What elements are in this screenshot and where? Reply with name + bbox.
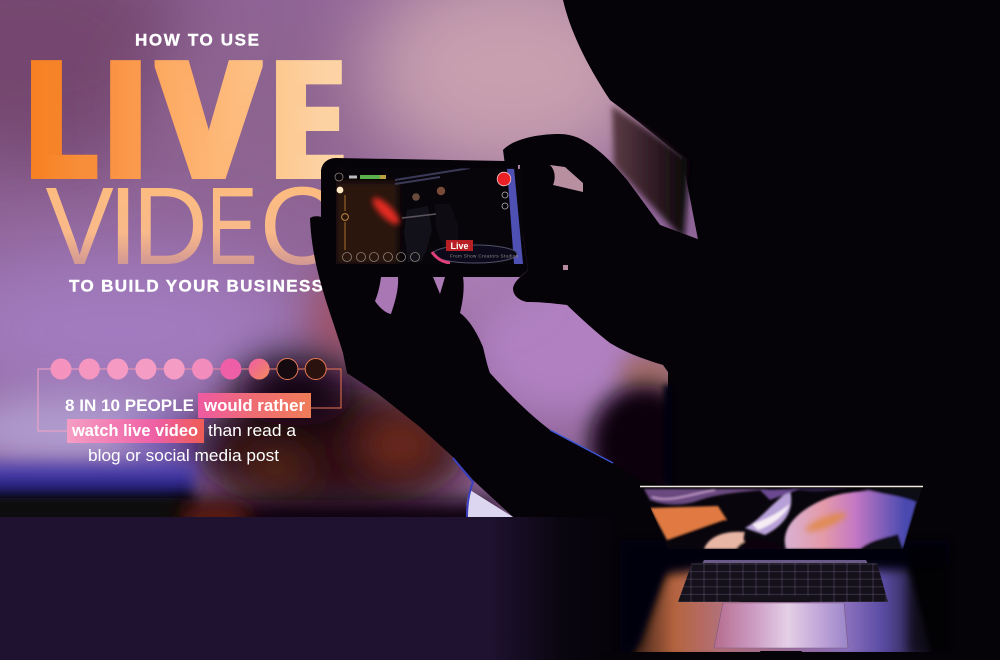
title word: LIVE: V	[159, 29, 258, 212]
stream caption: From Show Creators Studios	[450, 254, 519, 258]
hand edge over neck glow	[600, 152, 700, 300]
stage truss	[395, 168, 470, 184]
title word: LIVE	[33, 28, 339, 212]
red spotlight	[369, 194, 403, 228]
gaps between left hand fingers	[375, 277, 445, 314]
space bar	[740, 596, 810, 602]
title line: how to use: HOW TO USE	[135, 30, 259, 50]
live badge	[446, 240, 473, 251]
highlight: would rather	[198, 393, 311, 418]
audio level meter	[349, 175, 386, 179]
phone screen	[333, 167, 525, 265]
stat text: 8 IN 10 PEOPLE	[65, 396, 194, 415]
keyboard	[678, 563, 888, 602]
laptop screen	[640, 486, 925, 551]
phone body	[321, 158, 528, 277]
gap between right hand fingers	[550, 165, 583, 192]
stage blue light	[507, 168, 523, 264]
laptop	[632, 486, 930, 652]
bottom band	[0, 517, 1000, 660]
title word: LIVE: L	[33, 28, 92, 211]
title word: VIDEO: D	[132, 165, 208, 288]
stage lamp	[337, 187, 343, 193]
blue rim light	[550, 430, 613, 463]
arm highlights	[453, 430, 613, 517]
right hand	[503, 134, 700, 390]
ten people dots	[50, 358, 326, 380]
stat panel	[38, 358, 341, 465]
wallpaper: orange band	[650, 506, 727, 540]
title word: VIDEO	[46, 165, 345, 288]
title word: VIDEO: E	[207, 165, 257, 288]
wallpaper: central white streaks	[745, 490, 791, 535]
side camera icons	[502, 192, 508, 209]
stat text: than read a	[208, 421, 297, 440]
title word: LIVE: I	[103, 28, 148, 211]
soft right edge of shoulder	[664, 385, 672, 485]
wallpaper: right lobe	[785, 489, 920, 549]
phone	[321, 158, 528, 277]
title word: VIDEO: O	[260, 165, 345, 288]
live badge: Live	[450, 241, 469, 251]
background photo: blurred purple room	[0, 0, 698, 517]
touch bar glow	[702, 560, 868, 564]
title word: VIDEO: V	[46, 165, 114, 288]
base bottom edge	[600, 652, 960, 660]
lid notch	[760, 651, 802, 655]
stat text: blog or social media post	[88, 446, 279, 465]
wallpaper: upper left swirl	[644, 489, 770, 504]
base shadow from lid	[620, 540, 950, 660]
silhouette: head, hands and arm	[310, 0, 1000, 517]
left hand and forearm	[310, 216, 680, 517]
frame line	[38, 369, 341, 431]
presenter figures	[404, 206, 432, 262]
white rim glow	[466, 490, 513, 517]
stat text	[65, 396, 305, 465]
background sliver between fingers	[563, 265, 568, 270]
title line: to build your business: TO BUILD YOUR BUSINESS	[69, 276, 323, 296]
base right falloff	[908, 545, 948, 655]
floor shadow	[0, 452, 204, 510]
camera controls	[335, 173, 420, 262]
laptop top edge	[640, 486, 923, 488]
title word: LIVE: E	[278, 29, 339, 212]
stat text: watch live video	[71, 421, 198, 440]
stat text: would rather	[203, 396, 305, 415]
title word: VIDEO: I	[108, 165, 138, 288]
laptop base	[632, 552, 932, 656]
record button	[497, 172, 511, 186]
head and shoulder	[563, 0, 1000, 517]
trackpad	[714, 603, 848, 648]
title	[33, 28, 345, 296]
wallpaper: lower peach lobe	[704, 532, 750, 549]
neck glow	[612, 106, 690, 240]
highlight: watch live video	[67, 419, 204, 443]
